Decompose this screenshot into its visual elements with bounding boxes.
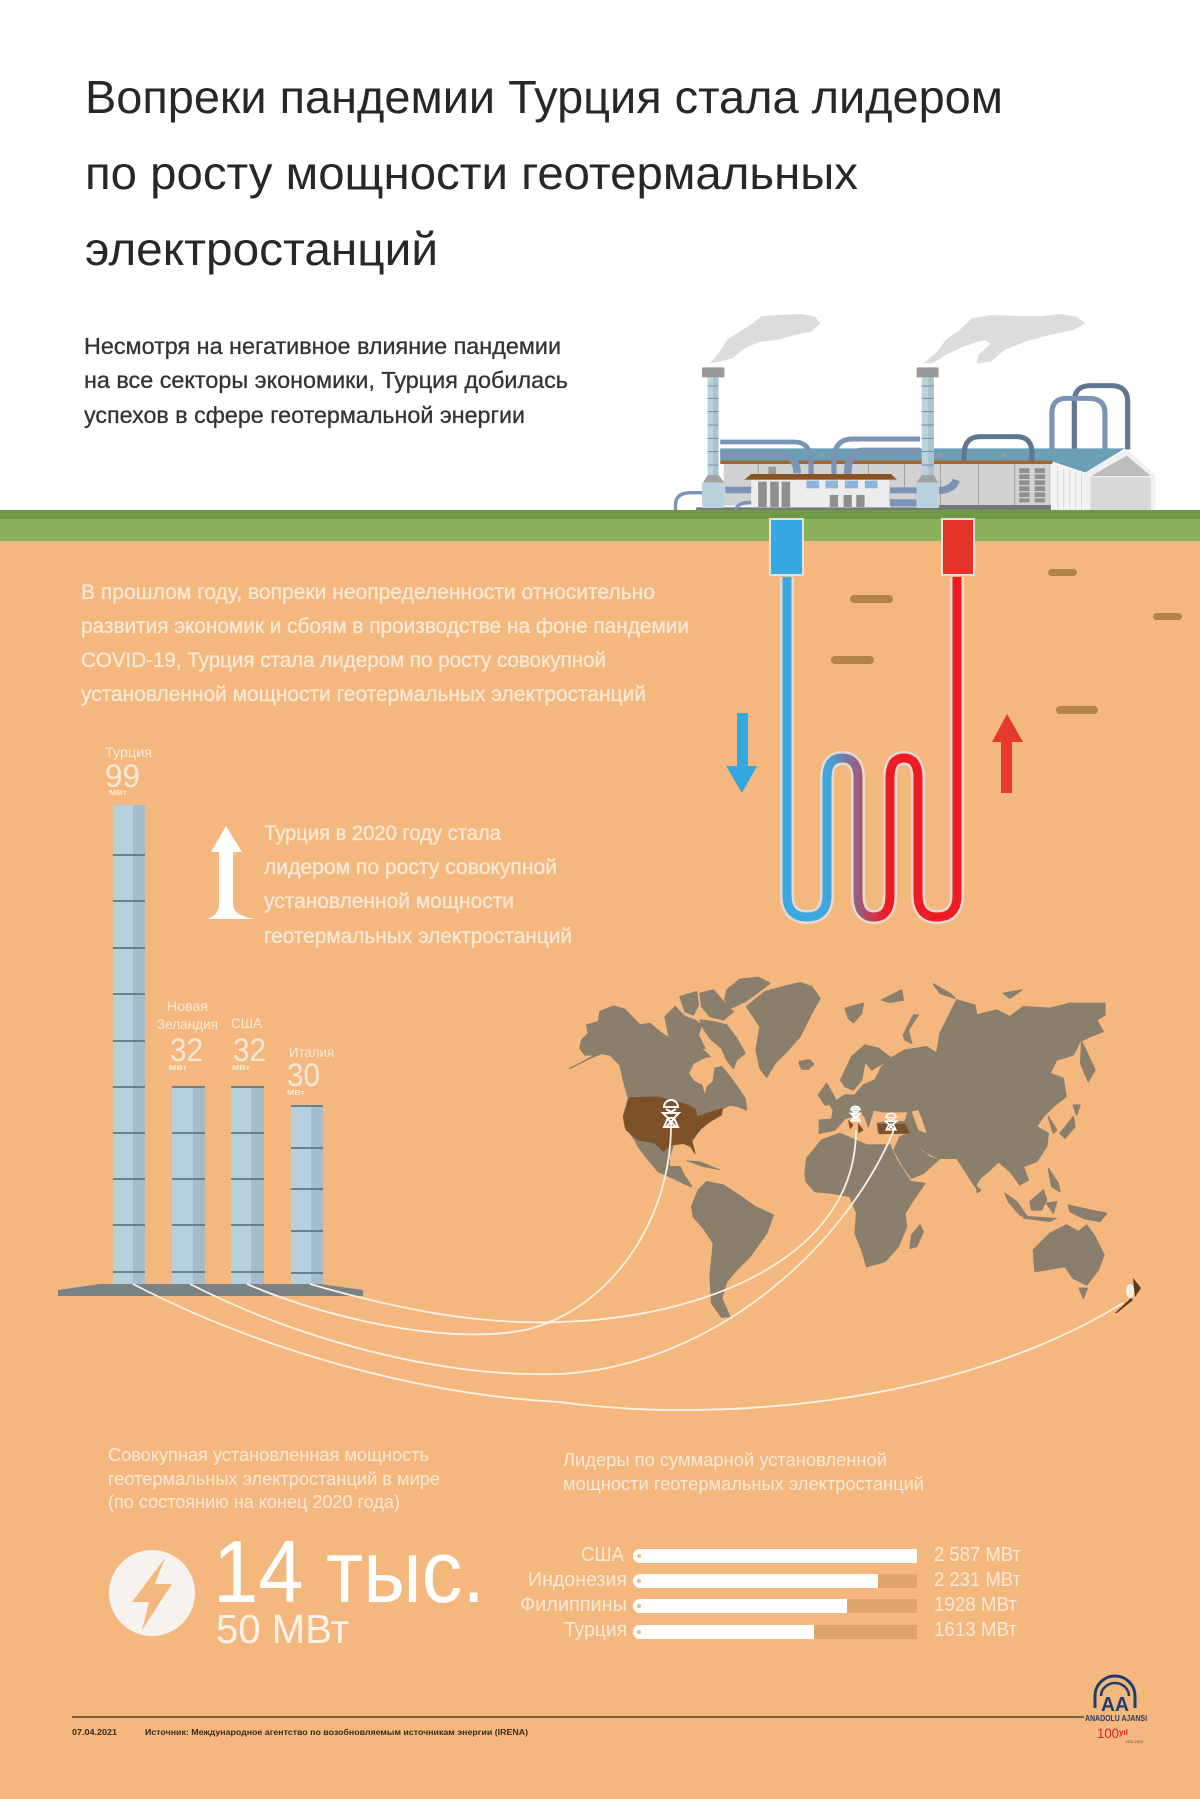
big number: world capacity: 50 МВт xyxy=(216,1606,349,1652)
subtitle text block: на все секторы экономики, Турция добилась xyxy=(84,367,568,393)
bar: Italy xyxy=(287,1044,334,1284)
intro text block: В прошлом году, вопреки неопределенности относительно xyxy=(81,581,655,604)
arrow: growth up xyxy=(207,826,255,919)
icon: tower USA xyxy=(663,1100,679,1127)
smokestack right xyxy=(917,367,939,508)
bar: New Zealand: Зеландия xyxy=(157,1016,218,1032)
footer: Источник: Международное агентство по возобновляемым источникам энергии (IRENA) xyxy=(145,1728,528,1737)
subtitle text block: Несмотря на негативное влияние пандемии xyxy=(84,333,561,359)
row: Indonesia: Индонезия xyxy=(528,1569,627,1591)
map: Italy and Turkey highlighted xyxy=(848,1120,910,1134)
bar: USA: 32 xyxy=(233,1032,266,1068)
ribbed hall xyxy=(1052,463,1087,511)
row: Indonesia xyxy=(528,1569,1021,1591)
geothermal pipe loop xyxy=(787,577,957,917)
logo: Anadolu Agency xyxy=(1085,1676,1147,1744)
bar: Italy: Италия xyxy=(289,1044,334,1060)
footer: 07.04.2021 xyxy=(72,1728,118,1737)
bar: USA: США xyxy=(231,1015,263,1031)
bar: Italy: МВт xyxy=(287,1088,305,1097)
world capacity caption xyxy=(108,1445,440,1512)
icon: tower New Zealand xyxy=(1126,1284,1134,1298)
map: Americas and Greenland xyxy=(570,977,820,1317)
row: Turkey xyxy=(564,1619,1017,1641)
callout: Turkey leader text xyxy=(264,822,572,948)
icon: tower Italy xyxy=(850,1106,861,1121)
callout: Turkey leader text: лидером по росту совокупной xyxy=(264,856,557,879)
logo: Anadolu Agency: AA xyxy=(1101,1694,1129,1716)
underground rock dashes xyxy=(831,569,1182,714)
row: USA xyxy=(581,1544,1021,1566)
chart base xyxy=(58,1284,363,1296)
intro text block: развития экономик и сбоям в производстве на фоне пандемии xyxy=(81,615,689,638)
intro text block xyxy=(81,581,689,706)
row: USA: 2 587 МВт xyxy=(934,1544,1021,1566)
callout: Turkey leader text: Турция в 2020 году стала xyxy=(264,822,501,845)
blue injection well xyxy=(770,519,803,575)
row: Turkey: Турция xyxy=(564,1619,627,1641)
arrow: cold water down xyxy=(726,713,757,793)
bar: New Zealand: Новая xyxy=(167,998,208,1014)
row: Turkey: 1613 МВт xyxy=(934,1619,1017,1641)
geothermal power plant illustration xyxy=(675,314,1155,511)
vent slats xyxy=(1019,468,1045,502)
subtitle text block xyxy=(84,333,568,428)
red production well xyxy=(942,519,974,575)
title: электростанций xyxy=(85,223,438,275)
bar: USA: МВт xyxy=(232,1063,250,1072)
title: Вопреки пандемии Турция стала лидером xyxy=(85,71,1003,123)
world capacity caption: геотермальных электростанций в мире xyxy=(108,1469,440,1489)
world capacity caption: Совокупная установленная мощность xyxy=(108,1445,429,1465)
world capacity caption: (по состоянию на конец 2020 года) xyxy=(108,1492,400,1512)
bar: Turkey: Турция xyxy=(105,744,152,760)
bar: New Zealand xyxy=(157,998,218,1284)
leaders caption: Лидеры по суммарной установленной xyxy=(563,1450,887,1470)
ground band xyxy=(0,510,1200,541)
logo: Anadolu Agency: yıl xyxy=(1119,1728,1128,1737)
bar: Turkey: МВт xyxy=(109,788,127,797)
map: New Zealand highlighted xyxy=(1115,1278,1141,1313)
row: Philippines: Филиппины xyxy=(520,1594,627,1616)
arrow: hot water up xyxy=(992,714,1023,793)
bar: New Zealand: 32 xyxy=(170,1032,203,1068)
callout: Turkey leader text: установленной мощности xyxy=(264,890,514,913)
intro text block: установленной мощности геотермальных электростанций xyxy=(81,683,646,706)
logo: Anadolu Agency: 100 xyxy=(1097,1725,1119,1741)
icon: lightning bolt xyxy=(109,1550,195,1636)
icon: tower Turkey xyxy=(885,1113,897,1130)
smokestack left xyxy=(702,367,724,508)
big number: world capacity: 14 тыс. xyxy=(213,1522,485,1621)
bar: Turkey xyxy=(105,744,152,1284)
bar: USA xyxy=(231,1015,266,1284)
map: USA highlighted xyxy=(623,1097,723,1153)
footer xyxy=(72,1716,1084,1737)
callout: Turkey leader text: геотермальных электростанций xyxy=(264,925,572,948)
row: Philippines: 1928 МВт xyxy=(934,1594,1017,1616)
row: USA: США xyxy=(581,1544,625,1566)
bar: Turkey: 99 xyxy=(105,758,140,794)
logo: Anadolu Agency: 1920-2020 xyxy=(1125,1739,1144,1744)
row: Philippines xyxy=(520,1594,1017,1616)
leaders caption: мощности геотермальных электростанций xyxy=(563,1474,924,1494)
logo: Anadolu Agency: ANADOLU AJANSI xyxy=(1085,1714,1147,1723)
intro text block: COVID-19, Турция стала лидером по росту совокупной xyxy=(81,649,606,672)
subtitle text block: успехов в сфере геотермальной энергии xyxy=(84,402,525,428)
leaders bar chart xyxy=(520,1544,1021,1641)
connector lines from bars to countries xyxy=(133,1123,1123,1410)
front building xyxy=(744,467,897,507)
world map xyxy=(570,977,1141,1317)
gabled hall xyxy=(1086,449,1155,511)
bar: New Zealand: МВт xyxy=(169,1063,187,1072)
bar chart: capacity growth xyxy=(58,744,363,1296)
leaders caption xyxy=(563,1450,924,1494)
map: Eurasia, Africa and Oceania xyxy=(799,984,1107,1298)
row: Indonesia: 2 231 МВт xyxy=(934,1569,1021,1591)
title xyxy=(85,71,1003,275)
bar: Italy: 30 xyxy=(287,1057,320,1093)
smoke plumes xyxy=(710,314,1085,363)
title: по росту мощности геотермальных xyxy=(85,147,858,199)
